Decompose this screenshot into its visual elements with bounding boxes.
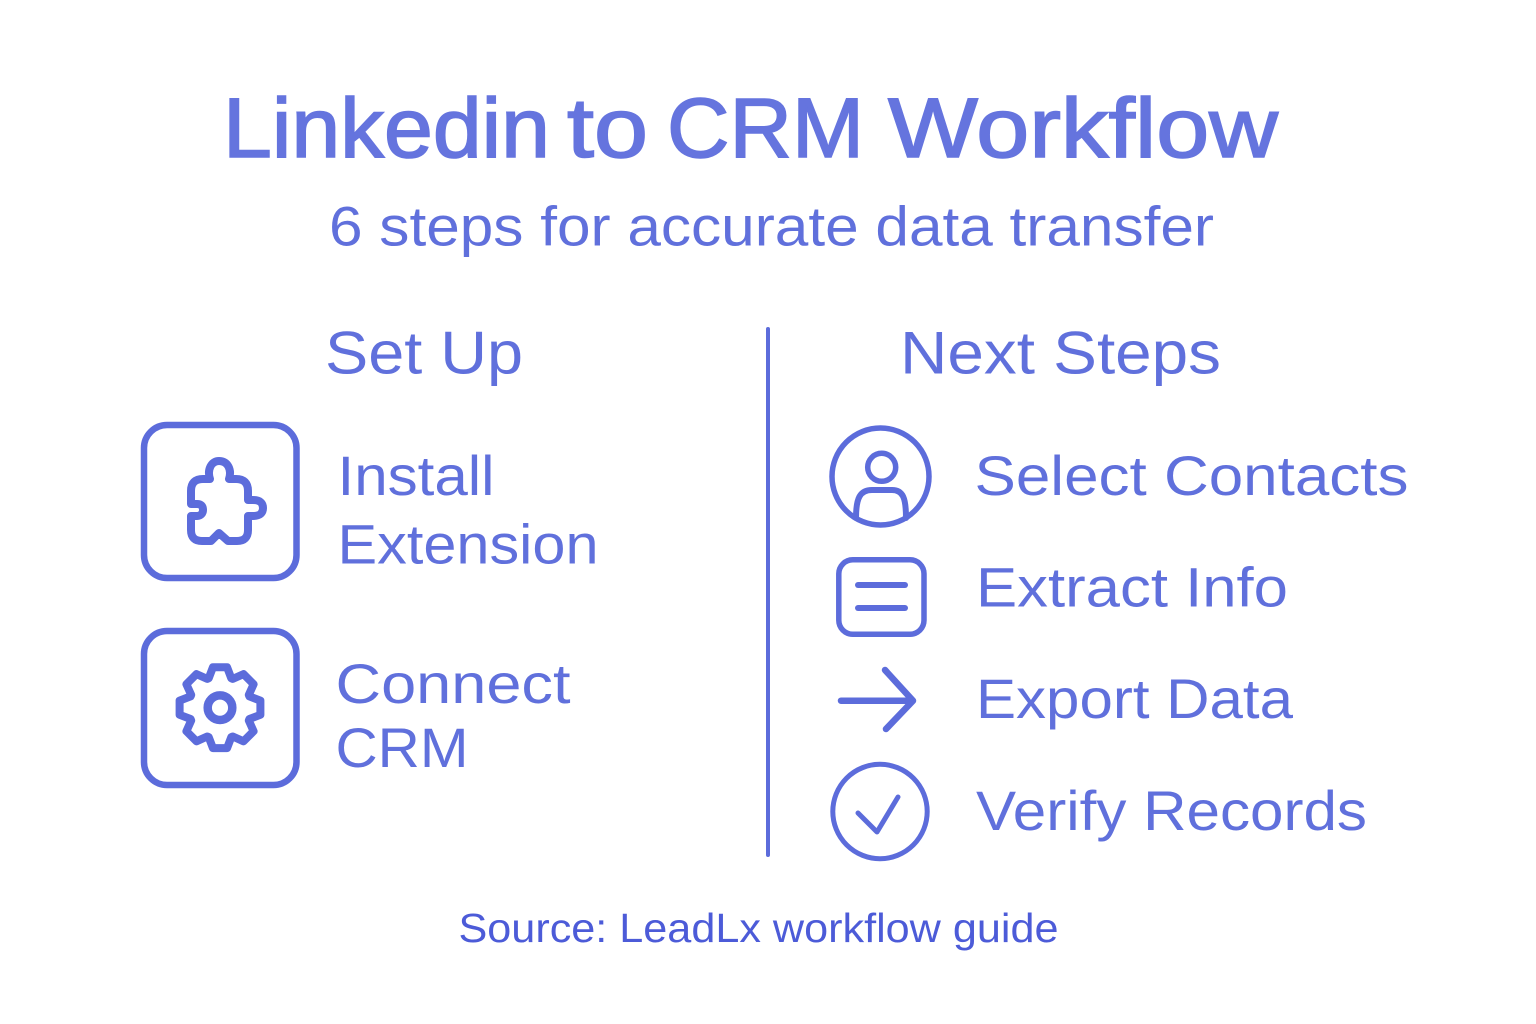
label: Connect CRM	[336, 652, 571, 779]
icon: gear in rounded box	[144, 631, 296, 785]
icon: person in circle	[832, 428, 929, 525]
source note: Source: LeadLx workflow guide	[458, 905, 1058, 951]
label: Export Data: Export Data	[976, 667, 1294, 730]
icon: document lines	[839, 560, 924, 634]
label: Extract Info: Extract Info	[976, 556, 1288, 618]
heading: Set Up: Set Up	[325, 320, 523, 386]
title: to	[567, 81, 648, 175]
label: Connect CRM: Connect	[336, 652, 571, 715]
step: select contacts	[832, 428, 1408, 525]
step: verify records	[833, 764, 1367, 859]
step: export data	[841, 667, 1294, 730]
panel: next steps	[832, 428, 1408, 859]
panel: set up steps	[144, 425, 598, 785]
step: install extension	[144, 425, 598, 578]
label: Install Extension: Install	[338, 444, 494, 507]
label: Verify Records: Verify Records	[976, 779, 1367, 842]
subtitle: 6 steps for accurate data transfer	[329, 194, 1214, 258]
icon: puzzle piece in rounded box	[144, 425, 296, 578]
step: connect CRM	[144, 631, 571, 785]
title: Linkedin	[223, 81, 550, 175]
label: Install Extension: Extension	[338, 512, 598, 576]
label: Connect CRM: CRM	[336, 716, 468, 779]
label: Select Contacts: Select Contacts	[974, 444, 1408, 507]
heading: Next Steps: Next Steps	[900, 320, 1221, 386]
title: Workflow	[888, 81, 1278, 175]
center divider	[766, 329, 770, 855]
title	[223, 81, 1278, 175]
icon: arrow	[841, 670, 913, 729]
icon: check in circle	[833, 764, 927, 859]
step: extract info	[839, 556, 1288, 634]
title: CRM	[667, 81, 864, 175]
label: Install Extension	[338, 444, 598, 576]
